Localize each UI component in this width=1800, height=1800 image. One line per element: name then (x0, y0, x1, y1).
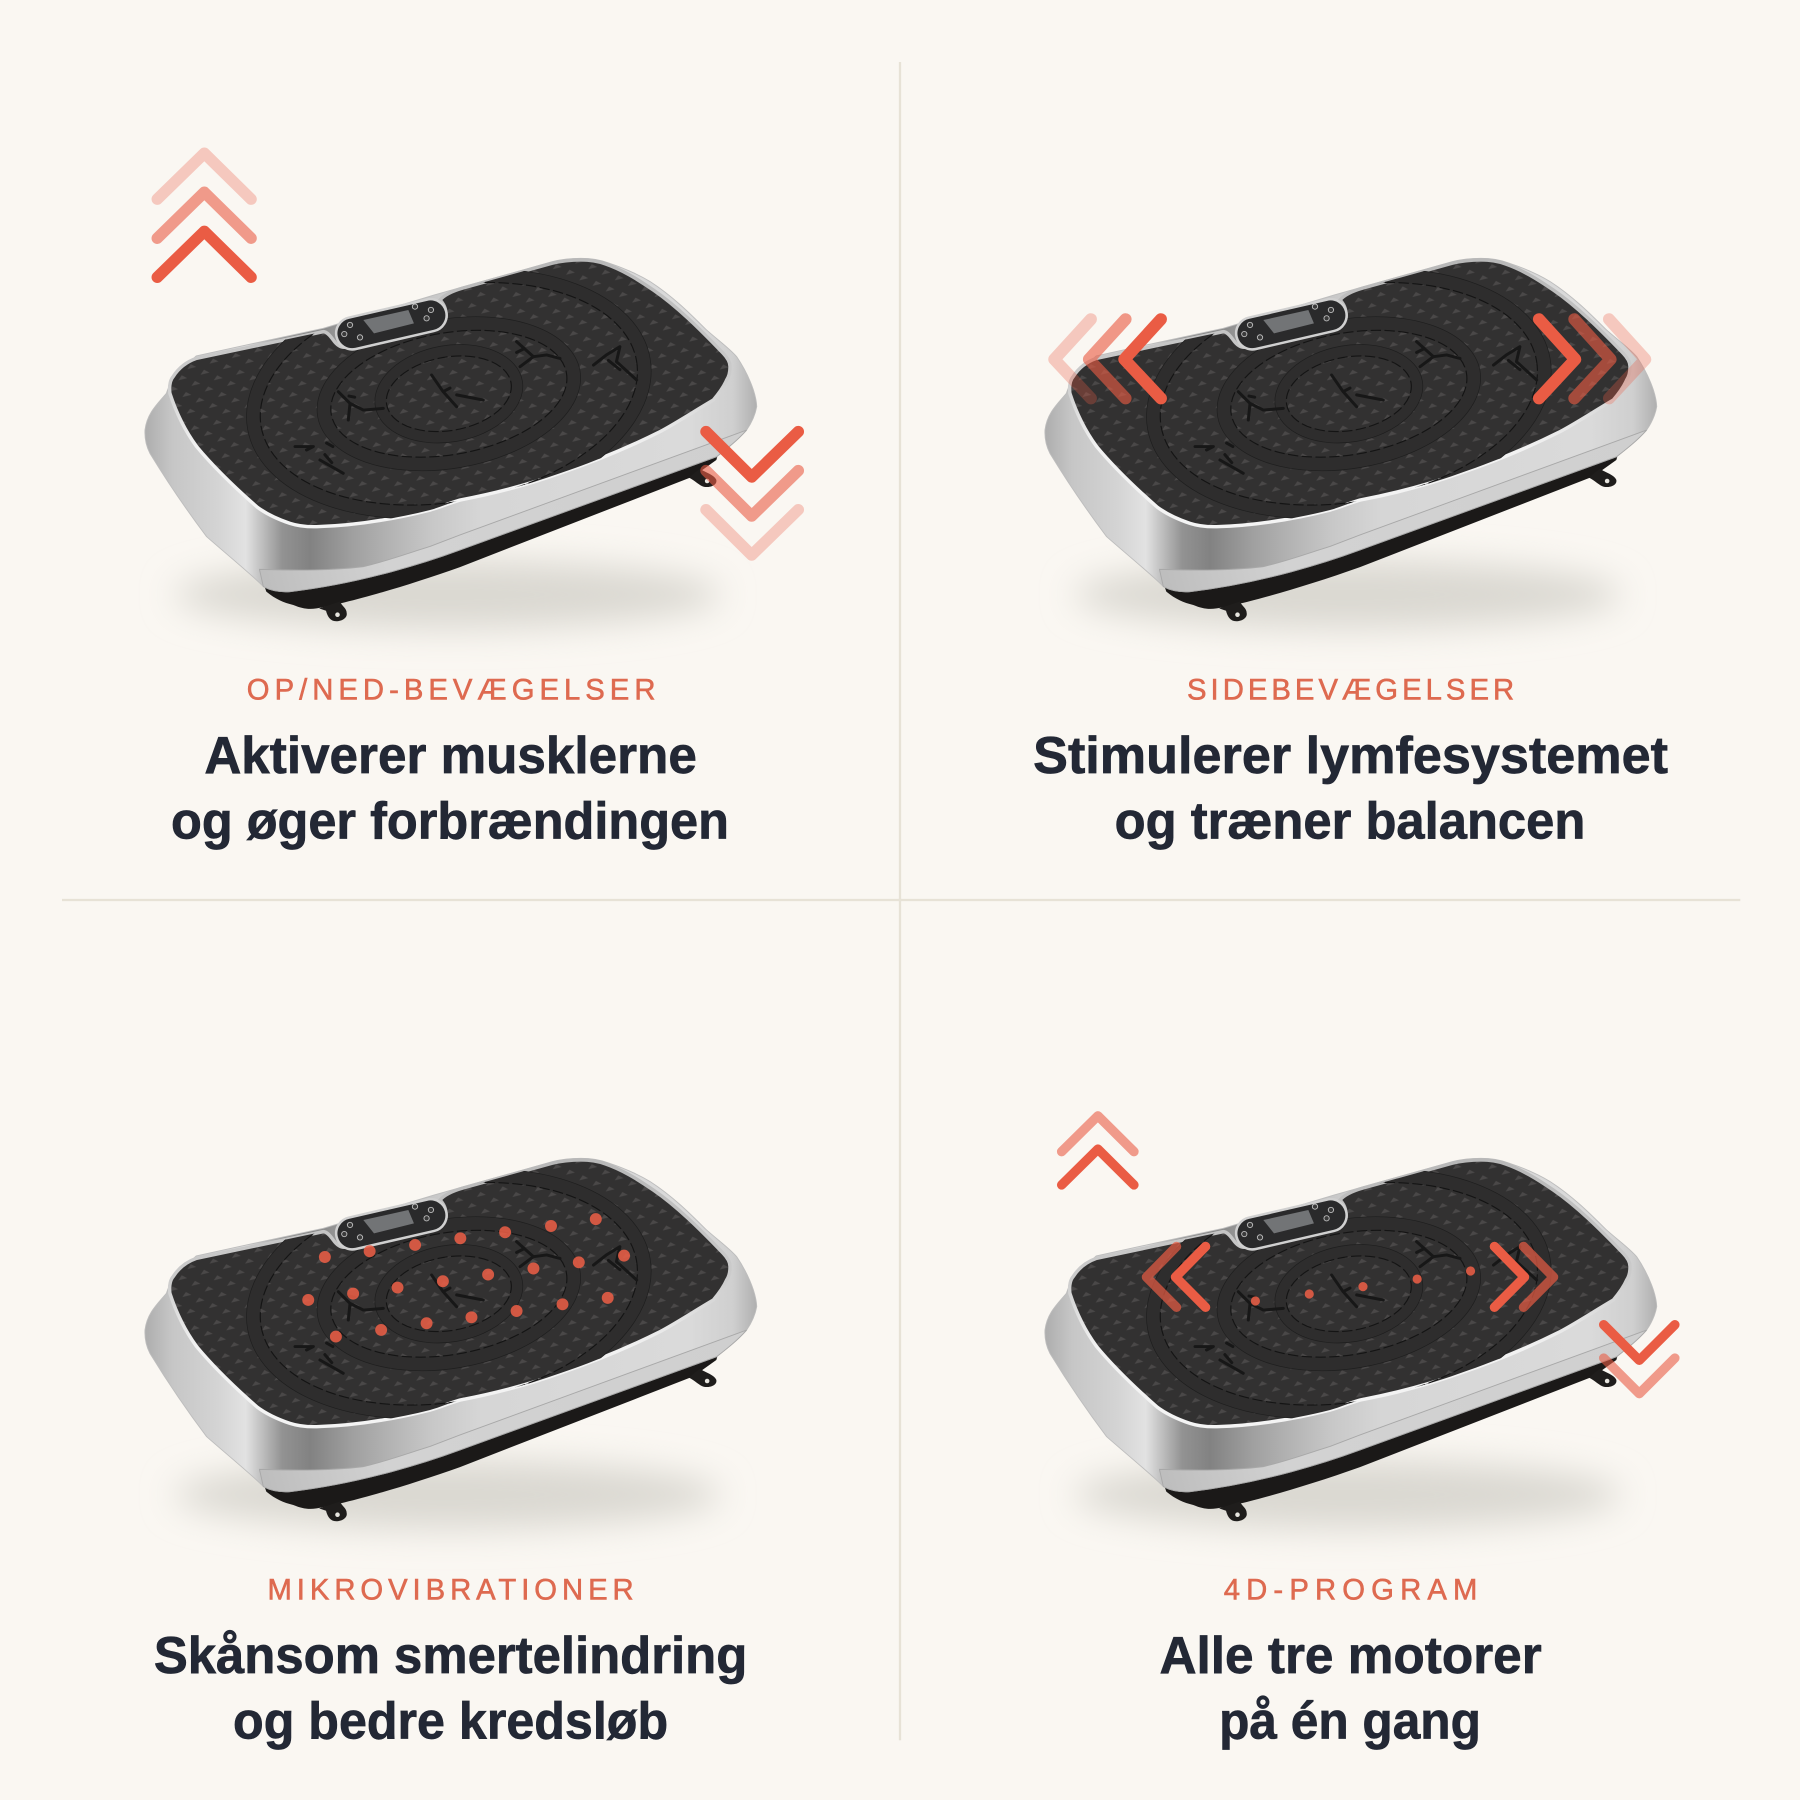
icon: right chevrons (1539, 319, 1645, 398)
icon: up chevrons (1062, 1116, 1134, 1185)
heading (171, 726, 729, 850)
label: MIKROVIBRATIONER (267, 1575, 634, 1607)
heading: og træner balancen (1115, 792, 1585, 850)
heading: på én gang (1219, 1692, 1481, 1750)
label: OP/NED-BEVÆGELSER (247, 675, 655, 707)
heading (1159, 1626, 1542, 1750)
icon: down chevrons (706, 432, 798, 555)
vibration plate (1045, 238, 1657, 621)
icon: left chevrons (1146, 1246, 1206, 1307)
heading: Skånsom smertelindring (154, 1626, 747, 1684)
icon: up chevrons (157, 153, 251, 277)
heading: og øger forbrændingen (171, 792, 729, 850)
icon: left chevrons (1054, 319, 1161, 398)
micro vibration dots (302, 1213, 630, 1343)
label: SIDEBEVÆGELSER (1187, 675, 1514, 707)
label: 4D-PROGRAM (1224, 1575, 1477, 1607)
icon: right chevrons (1494, 1246, 1554, 1307)
heading: Aktiverer musklerne (204, 726, 697, 784)
floor shadow (1074, 1460, 1621, 1529)
center dots (1251, 1266, 1475, 1306)
floor shadow (174, 560, 721, 629)
heading: Stimulerer lymfesystemet (1033, 726, 1668, 784)
panel: op/ned-bevægelser (145, 153, 798, 850)
icon: down chevrons (1604, 1325, 1675, 1394)
floor shadow (1074, 560, 1621, 629)
panel: mikrovibrationer (145, 1138, 757, 1750)
vibration plate (1045, 1138, 1657, 1521)
panel: sidebevægelser (1033, 238, 1668, 850)
panel: 4d-program (1045, 1116, 1675, 1750)
heading: og bedre kredsløb (233, 1692, 668, 1750)
vibration plate (145, 238, 757, 621)
heading (154, 1626, 747, 1750)
vibration plate (145, 1138, 757, 1521)
heading: Alle tre motorer (1159, 1626, 1542, 1684)
heading (1033, 726, 1668, 850)
floor shadow (174, 1460, 721, 1529)
